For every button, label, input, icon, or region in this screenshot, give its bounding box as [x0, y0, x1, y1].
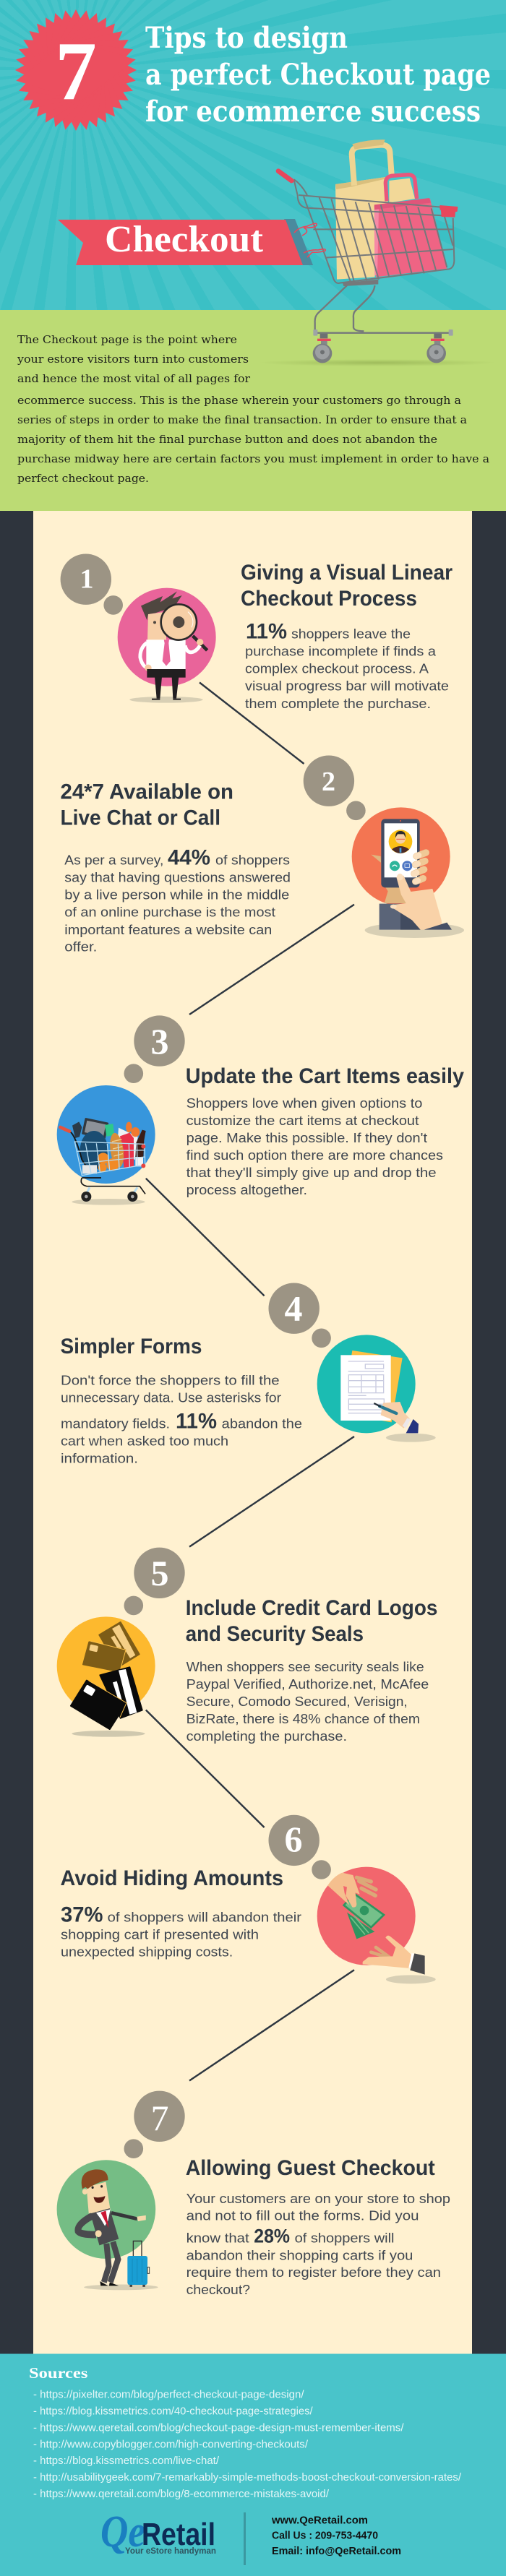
sources list: - https://www.qeretail.com/blog/checkout-page-design-must-remember-items/: [33, 2421, 404, 2434]
connector lines between steps: [146, 682, 354, 2081]
sources list: - https://pixelter.com/blog/perfect-checkout-page-design/: [33, 2389, 304, 2400]
step 1 text: visual progress bar will motivate: [245, 679, 449, 694]
step 6 text: of shoppers will abandon their: [108, 1909, 301, 1924]
step 5 text: Secure, Comodo Secured, Verisign,: [186, 1694, 408, 1709]
step 6 number bubble: 6: [285, 1819, 302, 1859]
QeRetail logo: Retail: [142, 2517, 215, 2552]
sources list: - http://www.copyblogger.com/high-converting-checkouts/: [33, 2438, 309, 2450]
contact details: www.QeRetail.com: [271, 2515, 368, 2527]
step 5 illustration: credit cards: [57, 1616, 155, 1737]
intro text: [17, 333, 489, 485]
illustration: shopping cart with bags: [278, 139, 458, 363]
step 1 text: them complete the purchase.: [245, 696, 431, 711]
step 4 number bubble: [269, 1283, 331, 1348]
step 2 text: by a live person while in the middle: [64, 887, 289, 902]
step 7 number bubble: 7: [150, 2098, 169, 2138]
step 6 text: [61, 1903, 301, 1960]
QeRetail logo: Your eStore handyman: [125, 2546, 216, 2556]
step 4 illustration: hand filling form: [317, 1335, 436, 1442]
step 1 number bubble: 1: [80, 564, 94, 595]
step 2 number bubble: 2: [322, 767, 335, 797]
step 2 text: offer.: [64, 939, 97, 954]
step 5 number bubble: 5: [150, 1553, 169, 1593]
step 1 heading: Checkout Process: [241, 587, 417, 611]
sources list: - https://blog.kissmetrics.com/live-chat/: [33, 2455, 220, 2467]
checkout ribbon: [58, 219, 325, 265]
step 5 text: When shoppers see security seals like: [186, 1659, 424, 1674]
dark side background: [0, 511, 506, 2354]
step 1 heading: Giving a Visual Linear: [241, 561, 453, 585]
checkout ribbon: Checkout: [105, 219, 264, 260]
step 1 text: complex checkout process. A: [245, 661, 429, 676]
icon: shopping cart shadow: [258, 359, 497, 366]
step 7 number bubble: [124, 2091, 185, 2158]
step 2 heading: Live Chat or Call: [61, 806, 220, 830]
intro text: perfect checkout page.: [17, 472, 149, 485]
intro text: purchase midway here are certain factors you must implement in order to have a: [17, 452, 489, 465]
step 1 text: [245, 619, 449, 711]
step 4 text: mandatory fields.: [61, 1416, 170, 1431]
intro text: majority of them hit the final purchase button and does not abandon the: [17, 433, 437, 446]
step 6 illustration: hands exchanging money: [317, 1867, 436, 1983]
intro text: and hence the most vital of all pages for: [17, 372, 251, 385]
step 7 text: Your customers are on your store to shop: [186, 2191, 450, 2206]
step 3 heading: Update the Cart Items easily: [186, 1064, 464, 1088]
step 2 number bubble: [304, 756, 366, 820]
sources heading: Sources: [29, 2364, 87, 2382]
step 7 text: abandon their shopping carts if you: [186, 2247, 413, 2262]
step 7 text: and not to fill out the forms. Did you: [186, 2208, 419, 2223]
step 2 text: [64, 845, 291, 954]
step 7 text: of shoppers will: [295, 2230, 395, 2245]
sources list: - https://blog.kissmetrics.com/40-checkout-page-strategies/: [33, 2405, 313, 2418]
QeRetail logo: [100, 2507, 216, 2556]
intro text: series of steps in order to make the final transaction. In order to ensure that a: [17, 413, 467, 426]
intro text: The Checkout page is the point where: [17, 333, 237, 346]
title: [145, 21, 491, 129]
step 1 illustration: man with magnifier: [118, 588, 216, 703]
step 7 heading: Allowing Guest Checkout: [186, 2156, 435, 2180]
step 4 text: abandon the: [222, 1416, 302, 1431]
step 2 text: As per a survey,: [64, 852, 163, 867]
step 3 text: [186, 1095, 443, 1197]
step 3 number bubble: 3: [150, 1021, 169, 1061]
step 4 text: cart when asked too much: [61, 1433, 228, 1448]
sources list: [33, 2389, 462, 2500]
step 5 heading: and Security Seals: [186, 1622, 364, 1646]
starburst badge with number 7: 7: [55, 25, 97, 117]
header sunburst background: [0, 0, 506, 310]
intro text: ecommerce success. This is the phase wherein your customers go through a: [17, 394, 461, 407]
step 6 heading: Avoid Hiding Amounts: [61, 1866, 283, 1890]
cream content panel: [33, 511, 472, 2354]
step 7 text: [186, 2191, 450, 2297]
step 5 text: Paypal Verified, Authorize.net, McAfee: [186, 1676, 429, 1692]
step 6 text: unexpected shipping costs.: [61, 1944, 233, 1960]
step 2 heading: 24*7 Available on: [61, 780, 233, 804]
step 2 text: say that having questions answered: [64, 869, 291, 884]
step 5 heading: Include Credit Card Logos: [186, 1596, 437, 1620]
step 7 text: require them to register before they can: [186, 2265, 441, 2280]
contact details: [271, 2515, 401, 2557]
step 3 text: page. Make this possible. If they don't: [186, 1130, 427, 1145]
step 1 heading: [241, 561, 453, 611]
step 3 illustration: full shopping cart: [57, 1085, 155, 1205]
sources list: - https://www.qeretail.com/blog/8-ecommerce-mistakes-avoid/: [33, 2488, 330, 2500]
step 6 text: shopping cart if presented with: [61, 1926, 259, 1942]
step 2 illustration: hand holding phone: [352, 807, 464, 938]
title: Tips to design: [145, 21, 348, 55]
step 3 text: find such option there are more chances: [186, 1147, 443, 1163]
step 3 text: Shoppers love when given options to: [186, 1095, 422, 1111]
step 2 text: 44%: [168, 845, 210, 869]
starburst badge with number 7: [8, 2, 144, 138]
contact details: Call Us : 209-753-4470: [272, 2530, 378, 2542]
step 1 text: purchase incomplete if finds a: [245, 643, 437, 659]
step 7 illustration: businessman with suitcase: [57, 2160, 158, 2290]
contact details: Email: info@QeRetail.com: [272, 2546, 401, 2557]
step 3 text: process altogether.: [186, 1182, 307, 1197]
footer panel: [0, 2354, 506, 2576]
step 2 text: important features a website can: [64, 922, 272, 937]
step 5 text: completing the purchase.: [186, 1728, 347, 1744]
step 6 number bubble: [269, 1815, 331, 1879]
step 5 text: BizRate, there is 48% chance of them: [186, 1711, 420, 1726]
step 3 text: that they'll simply give up and drop the: [186, 1165, 437, 1180]
sources list: - http://usabilitygeek.com/7-remarkably-simple-methods-boost-checkout-conversion-rates/: [33, 2471, 462, 2484]
QeRetail logo: Qe: [100, 2507, 145, 2556]
step 4 text: Don't force the shoppers to fill the: [61, 1373, 280, 1387]
step 5 heading: [186, 1596, 437, 1646]
step 1 text: 11%: [246, 619, 287, 643]
step 5 text: [186, 1659, 429, 1744]
step 4 text: information.: [61, 1451, 138, 1465]
step 1 number bubble: [61, 553, 123, 615]
step 4 text: [61, 1373, 302, 1465]
step 4 number bubble: 4: [285, 1288, 302, 1329]
step 6 text: 37%: [61, 1903, 103, 1926]
step 7 text: 28%: [254, 2225, 290, 2247]
step 4 text: unnecessary data. Use asterisks for: [61, 1390, 281, 1405]
step 7 text: checkout?: [186, 2282, 250, 2297]
step 2 text: of shoppers: [215, 852, 290, 867]
intro green panel: [0, 310, 506, 511]
step 3 text: customize the cart items at checkout: [186, 1113, 419, 1128]
step 2 text: of an online purchase is the most: [64, 905, 275, 920]
intro text: your estore visitors turn into customers: [17, 353, 249, 366]
step 4 text: 11%: [176, 1409, 217, 1433]
step 1 text: shoppers leave the: [291, 626, 411, 641]
step 7 text: know that: [186, 2230, 249, 2245]
step 5 number bubble: [124, 1548, 185, 1615]
footer divider: [244, 2512, 246, 2565]
step 3 number bubble: [124, 1015, 185, 1083]
step 4 heading: Simpler Forms: [61, 1335, 202, 1358]
step 2 heading: [61, 780, 233, 830]
